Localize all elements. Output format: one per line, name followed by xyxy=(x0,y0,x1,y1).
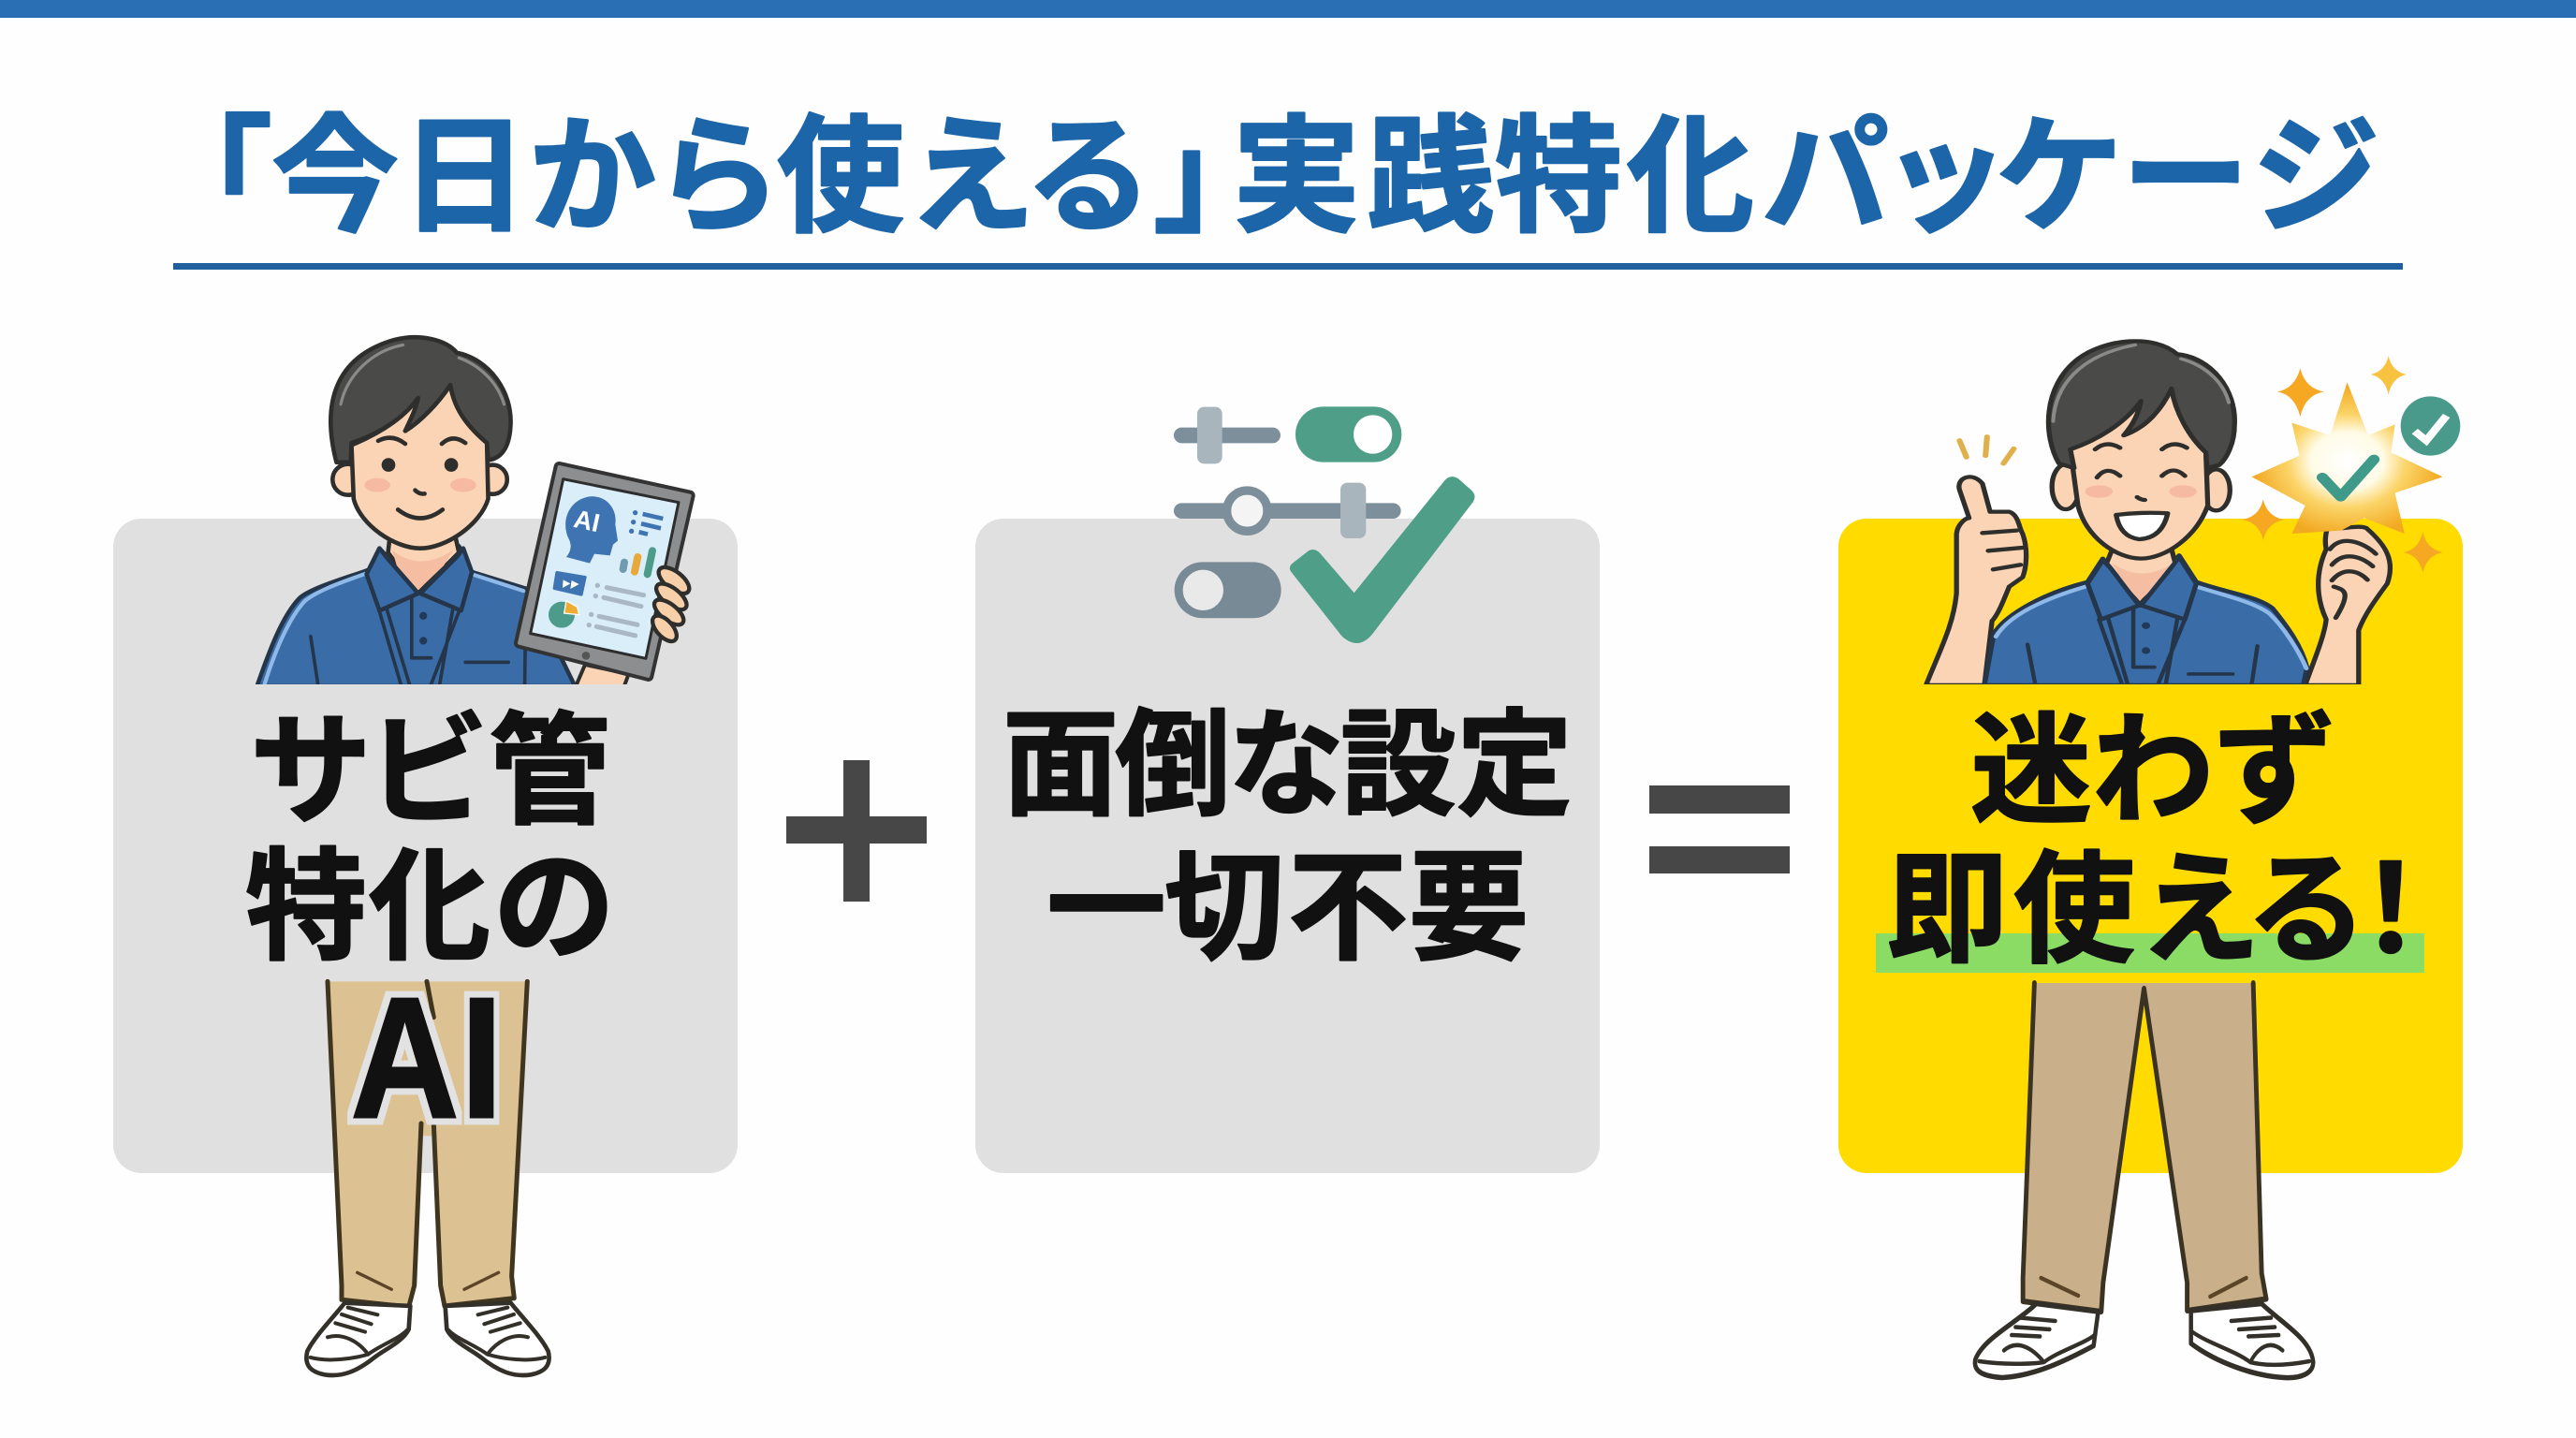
face xyxy=(2071,389,2208,559)
green highlight xyxy=(1876,933,2424,973)
collar xyxy=(2087,557,2196,620)
mini bar chart xyxy=(623,563,624,569)
right shoe xyxy=(2191,1303,2313,1378)
ears xyxy=(2052,464,2080,509)
check mark xyxy=(1290,477,1474,643)
eyes xyxy=(382,458,395,472)
tablet body xyxy=(520,467,690,676)
left shoe xyxy=(306,1303,410,1375)
panel: サビ管特化のAI xyxy=(113,519,738,1173)
left shoe xyxy=(1975,1303,2099,1378)
hair xyxy=(2048,341,2234,468)
text: 即使える!: 即使える！ xyxy=(1886,812,2452,988)
AI head xyxy=(565,496,618,564)
face xyxy=(352,385,489,549)
icon: sparkle burst with checks xyxy=(2242,356,2460,573)
forearm behind tablet xyxy=(576,665,629,686)
title xyxy=(145,74,2379,258)
check in burst xyxy=(2322,460,2374,497)
text: 面倒な設定: 面倒な設定 xyxy=(1003,670,1573,839)
starburst xyxy=(2252,382,2443,534)
right shoe xyxy=(446,1303,549,1375)
slider one xyxy=(1174,428,1281,443)
text: 迷わず: 迷わず xyxy=(1970,672,2335,848)
title: 実践特化パッケージ xyxy=(1233,74,2379,258)
collar xyxy=(367,549,472,610)
list xyxy=(629,510,637,534)
figure: happy worker upper body xyxy=(1926,341,2390,685)
check badge xyxy=(2401,396,2460,456)
icon: settings sliders and check xyxy=(1174,406,1474,643)
panel: 迷わず即使える xyxy=(1838,519,2463,1173)
operator: equals xyxy=(1649,785,1790,873)
trousers xyxy=(328,981,527,1307)
green toggle xyxy=(1295,406,1401,462)
grey toggle xyxy=(1175,562,1281,618)
neck xyxy=(388,534,459,594)
fingers xyxy=(648,563,694,645)
title rule xyxy=(173,263,2403,270)
fist arm xyxy=(2305,527,2390,685)
text: サビ管特化の xyxy=(245,673,615,985)
home button xyxy=(582,652,590,660)
icon: tablet with AI dashboard xyxy=(520,467,694,676)
AI label: AI xyxy=(571,504,603,537)
hair xyxy=(330,337,511,462)
neck xyxy=(2107,550,2175,605)
placket and lanyard xyxy=(2027,607,2258,684)
sparkles xyxy=(2242,356,2443,573)
shirt xyxy=(1984,555,2307,685)
top bar xyxy=(0,0,2576,18)
figure: worker upper body with tablet xyxy=(256,337,629,686)
slider two xyxy=(1174,503,1401,519)
shoulder highlights xyxy=(265,574,523,683)
video icon xyxy=(554,573,585,594)
figure: happy worker legs xyxy=(1975,983,2313,1378)
grey text lines xyxy=(587,583,600,627)
shirt xyxy=(256,546,575,686)
cheeks xyxy=(2086,485,2113,498)
smiling eyes and brows xyxy=(2095,445,2187,500)
text: 一切不要: 一切不要 xyxy=(1046,811,1529,984)
operator: plus xyxy=(786,760,927,902)
text: サビ管特化の: サビ管 xyxy=(250,673,610,849)
placket xyxy=(311,597,525,684)
figure: worker legs xyxy=(306,981,549,1375)
cheeks xyxy=(364,478,390,492)
panel: 面倒な設定一切不要 xyxy=(975,519,1600,1173)
ears xyxy=(330,464,352,497)
text: サビ管特化の: 特化の xyxy=(245,809,615,985)
raised thumb arm xyxy=(1926,477,2027,685)
pie chart xyxy=(549,602,575,628)
title: 「今日から使える」 xyxy=(145,74,1281,258)
screen xyxy=(531,479,679,658)
eyebrows and mouth xyxy=(378,438,465,519)
trousers xyxy=(2023,983,2266,1312)
open mouth xyxy=(2116,513,2168,539)
thumb ticks xyxy=(1959,437,2013,463)
text: AI: AI xyxy=(351,963,503,1153)
